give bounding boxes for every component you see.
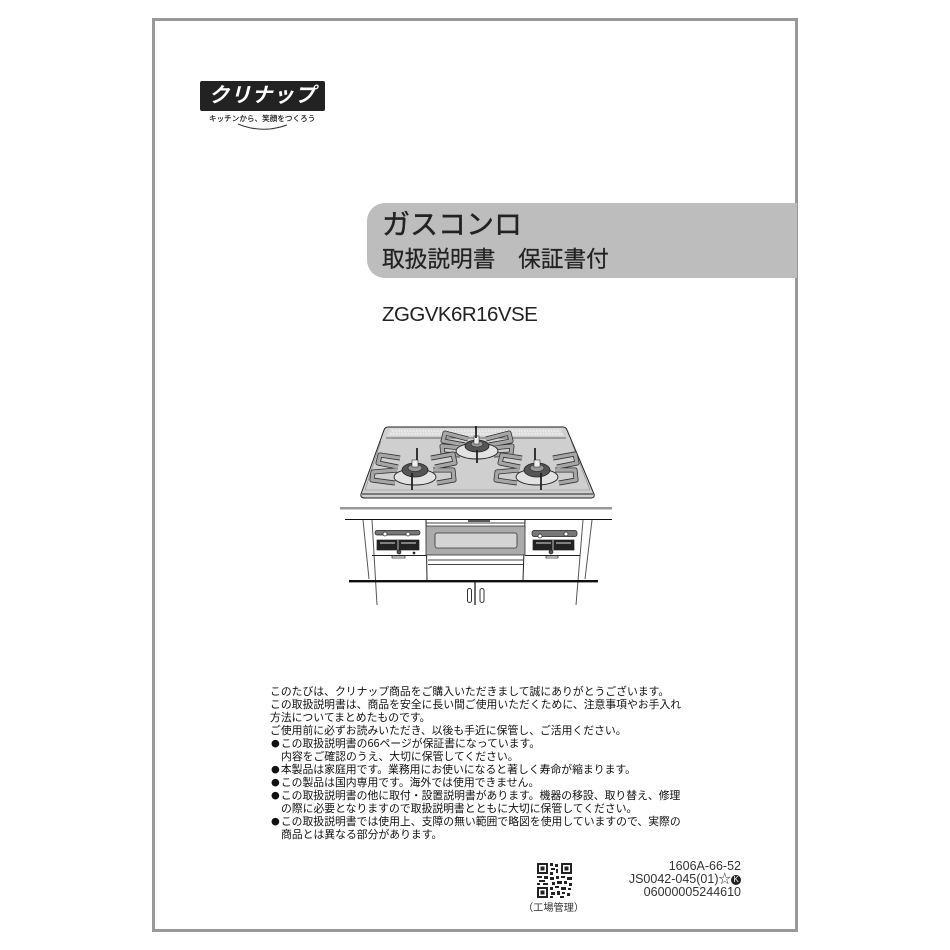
counter edge bbox=[340, 507, 612, 510]
notice text: の際に必要となりますので取扱説明書とともに大切に保管してください。 bbox=[281, 800, 637, 816]
notice text: この取扱説明書の66ページが保証書になっています。 bbox=[281, 735, 540, 751]
illustration: gas hob bbox=[340, 426, 612, 605]
notice text: この取扱説明書では使用上、支障の無い範囲で略図を使用していますので、実際の bbox=[281, 813, 681, 829]
oven window bbox=[426, 526, 525, 555]
left controls bbox=[375, 530, 420, 558]
QR caption: （工場管理） bbox=[523, 903, 584, 914]
right controls bbox=[532, 530, 577, 558]
notice text bbox=[270, 683, 681, 842]
model number: ZGGVK6R16VSE bbox=[382, 303, 537, 326]
notice text: ● bbox=[271, 738, 280, 750]
counter line bbox=[345, 518, 612, 520]
notice text: ● bbox=[271, 764, 280, 776]
logo: Cleanup bbox=[200, 81, 325, 130]
notice text: このたびは、クリナップ商品をご購入いただきまして誠にありがとうございます。 bbox=[270, 683, 669, 699]
notice text: この取扱説明書の他に取付・設置説明書があります。機器の移設、取り替え、修理 bbox=[281, 787, 680, 803]
logo smile arc bbox=[238, 124, 288, 130]
document codes: 06000005244610 bbox=[644, 885, 741, 899]
notice text: 内容をご確認のうえ、大切に保管してください。 bbox=[281, 748, 519, 764]
banner subheading: 取扱説明書 保証書付 bbox=[382, 246, 609, 272]
document codes: 1606A-66-52 bbox=[669, 859, 741, 873]
logo tagline: キッチンから、笑顔をつくろう bbox=[209, 114, 315, 123]
logo badge: クリナップ bbox=[209, 84, 316, 107]
logo badge bbox=[200, 81, 325, 111]
banner heading: ガスコンロ bbox=[382, 209, 522, 240]
hob top plate bbox=[361, 427, 594, 498]
notice text: ご使用前に必ずお読みいただき、以後も手近に保管し、ご活用ください。 bbox=[270, 722, 627, 738]
notice text: この製品は国内専用です。海外では使用できません。 bbox=[281, 774, 539, 790]
notice text: この取扱説明書は、商品を安全に長い間ご使用いただくために、注意事項やお手入れ bbox=[270, 696, 681, 712]
document codes bbox=[629, 859, 741, 899]
cabinet bbox=[468, 582, 484, 605]
document codes: K bbox=[733, 875, 739, 884]
document codes: JS0042-045(01)☆ bbox=[629, 872, 731, 886]
notice text: ● bbox=[271, 777, 280, 789]
notice text: 方法についてまとめたものです。 bbox=[270, 709, 430, 725]
notice text: 商品とは異なる部分があります。 bbox=[281, 826, 442, 842]
burner: rear centre bbox=[442, 426, 512, 463]
QR code bbox=[537, 863, 572, 898]
notice text: ● bbox=[271, 790, 280, 802]
base line bbox=[349, 580, 598, 582]
page border bbox=[152, 18, 798, 932]
notice text: 本製品は家庭用です。業務用にお使いになると著しく寿命が縮まります。 bbox=[281, 761, 636, 777]
burner: front left bbox=[372, 448, 455, 490]
title banner bbox=[367, 203, 797, 278]
notice text: ● bbox=[271, 816, 280, 828]
front fascia bbox=[363, 520, 592, 605]
burner: front right bbox=[496, 448, 577, 490]
